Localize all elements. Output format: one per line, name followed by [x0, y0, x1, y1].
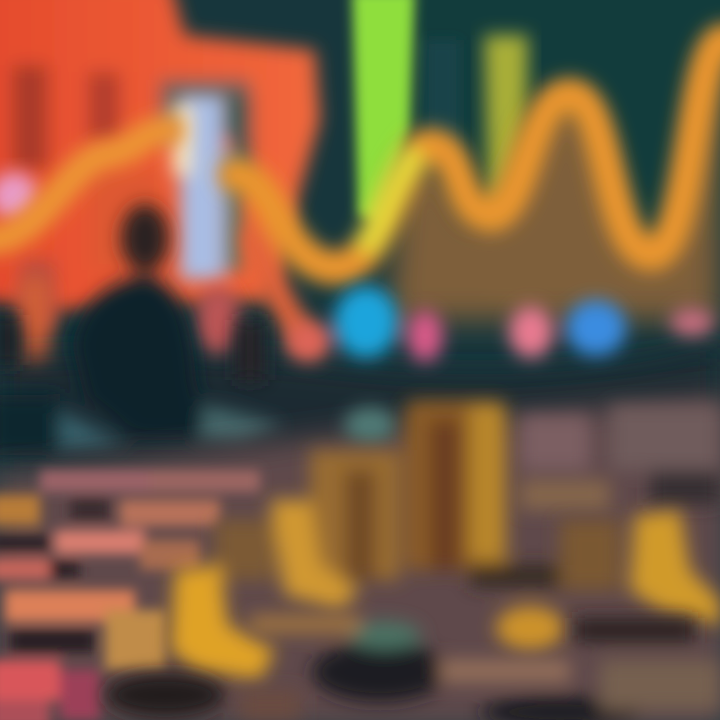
panel: orange-red building	[0, 0, 320, 330]
dark desk band	[0, 345, 720, 470]
wave chart fill below line	[390, 40, 720, 320]
pink light on left	[0, 172, 38, 220]
wave chart: orange line	[0, 40, 720, 360]
dark coin bases and foreground	[105, 615, 720, 720]
yellow-olive bar	[484, 35, 528, 290]
lower field: mottled pink ground	[0, 395, 720, 720]
glowing window	[172, 95, 242, 280]
coin stacks	[170, 400, 720, 680]
person silhouette	[0, 204, 285, 455]
pattern of pink and orange tiles at lower left	[0, 470, 260, 720]
background: dark teal upper wall	[0, 0, 720, 400]
right-hand grey-pink blocks	[344, 405, 720, 510]
monitors: blue and pink glow	[196, 286, 714, 362]
green bar	[352, 0, 460, 225]
